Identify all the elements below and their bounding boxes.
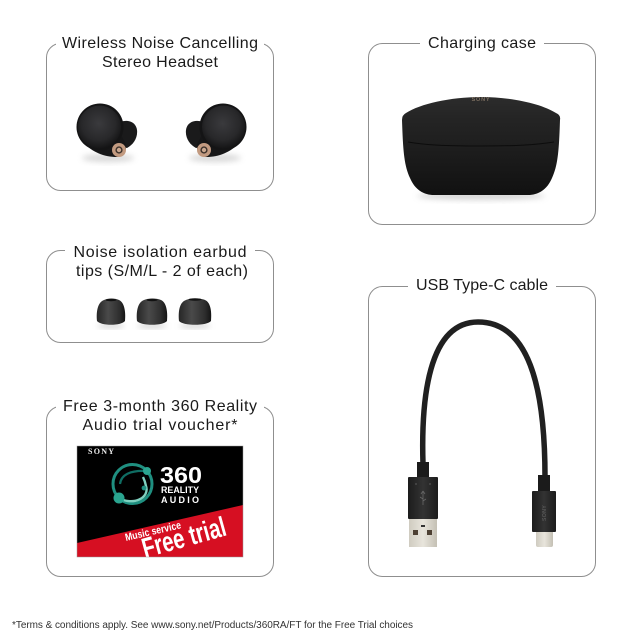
voucher 360 text: REALITY — [161, 485, 199, 495]
heading: charging case: Charging case — [428, 35, 536, 52]
voucher trial text: Free trial — [138, 511, 229, 564]
icon: left earbud — [76, 104, 137, 162]
USB-A connector — [408, 462, 438, 547]
heading: headset: Wireless Noise Cancelling — [62, 35, 258, 52]
voucher 360 text — [160, 467, 201, 503]
USB-C connector — [532, 475, 556, 547]
heading: earbud tips — [74, 244, 248, 280]
panel: noise isolation earbud tips — [46, 243, 274, 342]
voucher logo: SONY — [88, 447, 114, 456]
heading: voucher: Free 3-month 360 Reality — [63, 398, 257, 415]
heading: voucher: Audio trial voucher* — [82, 417, 238, 434]
icon: right earbud — [186, 104, 246, 162]
USB-C connector: SONY — [542, 505, 548, 521]
panel: charging case — [368, 35, 596, 224]
icon: USB cable — [408, 322, 556, 547]
footnote: *Terms & conditions apply. See www.sony.net/Products/360RA/FT for the Free Trial choices — [12, 620, 413, 631]
heading: headset: Stereo Headset — [102, 54, 219, 71]
heading: earbud tips: tips (S/M/L - 2 of each) — [76, 263, 248, 280]
heading: earbud tips: Noise isolation earbud — [74, 244, 246, 261]
voucher trial text — [125, 516, 226, 557]
voucher 360 text: 360 — [160, 462, 202, 488]
icon: three earbud tips — [97, 298, 211, 328]
voucher card — [77, 446, 243, 564]
voucher 360 text: AUDIO — [161, 495, 199, 505]
panel: USB Type-C cable — [368, 277, 596, 576]
panel: 360 Reality Audio voucher — [46, 398, 274, 576]
heading: USB cable: USB Type-C cable — [416, 277, 548, 294]
heading: headset — [62, 35, 258, 71]
voucher trial text: Music service — [124, 519, 182, 544]
icon: charging case — [402, 97, 560, 200]
heading: voucher — [63, 398, 257, 434]
icon: 360 rings — [113, 464, 152, 504]
case logo: SONY — [472, 97, 490, 103]
panel: wireless noise cancelling stereo headset — [46, 35, 274, 190]
